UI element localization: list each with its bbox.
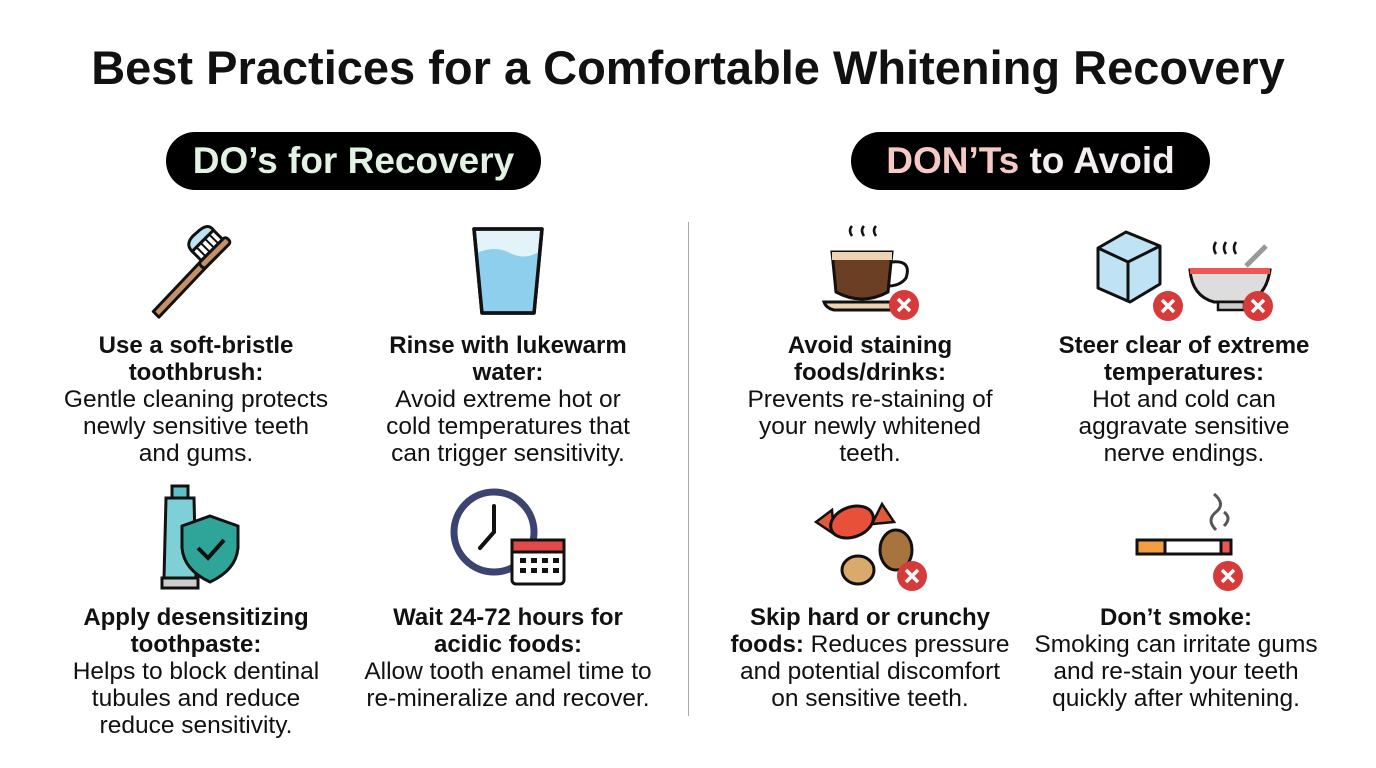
icon: water glass [472, 227, 544, 315]
text: hard foods: and potential discomfort [740, 658, 1000, 685]
text: soft-bristle [64, 332, 328, 467]
pill: DONTs heading: DON’Ts to Avoid [886, 140, 1175, 181]
text: staining foods: your newly whitened [759, 413, 981, 440]
text: desensitizing [73, 604, 319, 739]
text: extreme temperatures: Steer clear of extreme [1059, 332, 1309, 359]
text: staining foods: Prevents re-staining of [747, 386, 993, 413]
icon: cigarette [1136, 492, 1243, 591]
pill: DONTs heading [851, 132, 1210, 190]
text: staining foods: teeth. [839, 440, 901, 467]
text: extreme temperatures: aggravate sensitive [1078, 413, 1290, 440]
text: soft-bristle: and gums. [139, 440, 253, 467]
text: wait 24-72 hours: Allow tooth enamel time to [364, 658, 652, 685]
icon: toothpaste with shield [160, 484, 240, 590]
text: don't smoke: Don’t smoke: [1100, 604, 1252, 631]
text: soft-bristle: Gentle cleaning protects [64, 386, 328, 413]
text: lukewarm water [386, 332, 630, 467]
icon: coffee cup [822, 225, 919, 320]
icon: candy and nuts [814, 502, 927, 591]
text: don't smoke: and re-stain your teeth [1053, 658, 1299, 685]
icon: ice and hot bowl [1096, 230, 1273, 321]
title: Best Practices for a Comfortable Whitening Recovery [91, 41, 1285, 94]
text: desensitizing: tubules and reduce [92, 685, 300, 712]
text: wait 24-72 hours: acidic foods: [434, 631, 582, 658]
text: don't smoke: quickly after whitening. [1052, 685, 1300, 712]
text: lukewarm water: cold temperatures that [386, 413, 630, 440]
pill: DOs heading [166, 132, 541, 190]
text: lukewarm water: water: [473, 359, 543, 386]
text: hard foods: foods: Reduces pressure [731, 631, 1009, 658]
text: staining foods: Avoid staining [788, 332, 952, 359]
text: hard foods [730, 604, 1009, 712]
text: don't smoke [1034, 604, 1318, 712]
text: lukewarm water: can trigger sensitivity. [391, 440, 625, 467]
text: extreme temperatures: temperatures: [1104, 359, 1264, 386]
text: lukewarm water: Avoid extreme hot or [395, 386, 621, 413]
text: extreme temperatures: Hot and cold can [1092, 386, 1276, 413]
text: wait 24-72 hours [364, 604, 652, 712]
text: desensitizing: Apply desensitizing [83, 604, 309, 631]
pill: DOs heading: DO’s for Recovery [193, 140, 514, 181]
text: soft-bristle: Use a soft-bristle [99, 332, 293, 359]
text: extreme temperatures: nerve endings. [1104, 440, 1264, 467]
text: hard foods: Skip hard or crunchy [750, 604, 990, 631]
text: wait 24-72 hours: Wait 24-72 hours for [393, 604, 623, 631]
text: hard foods: on sensitive teeth. [771, 685, 969, 712]
text: don't smoke: Smoking can irritate gums [1034, 631, 1318, 658]
text: desensitizing: Helps to block dentinal [73, 658, 319, 685]
text: wait 24-72 hours: re-mineralize and recover. [366, 685, 650, 712]
text: soft-bristle: toothbrush: [129, 359, 263, 386]
icon: toothbrush [152, 225, 232, 319]
text: staining foods [747, 332, 993, 467]
text: extreme temperatures [1059, 332, 1309, 467]
text: staining foods: foods/drinks: [794, 359, 946, 386]
text: soft-bristle: newly sensitive teeth [83, 413, 309, 440]
text: desensitizing: toothpaste: [131, 631, 261, 658]
text: lukewarm water: Rinse with lukewarm [389, 332, 627, 359]
text: desensitizing: reduce sensitivity. [100, 712, 292, 739]
icon: clock and calendar [450, 488, 566, 586]
